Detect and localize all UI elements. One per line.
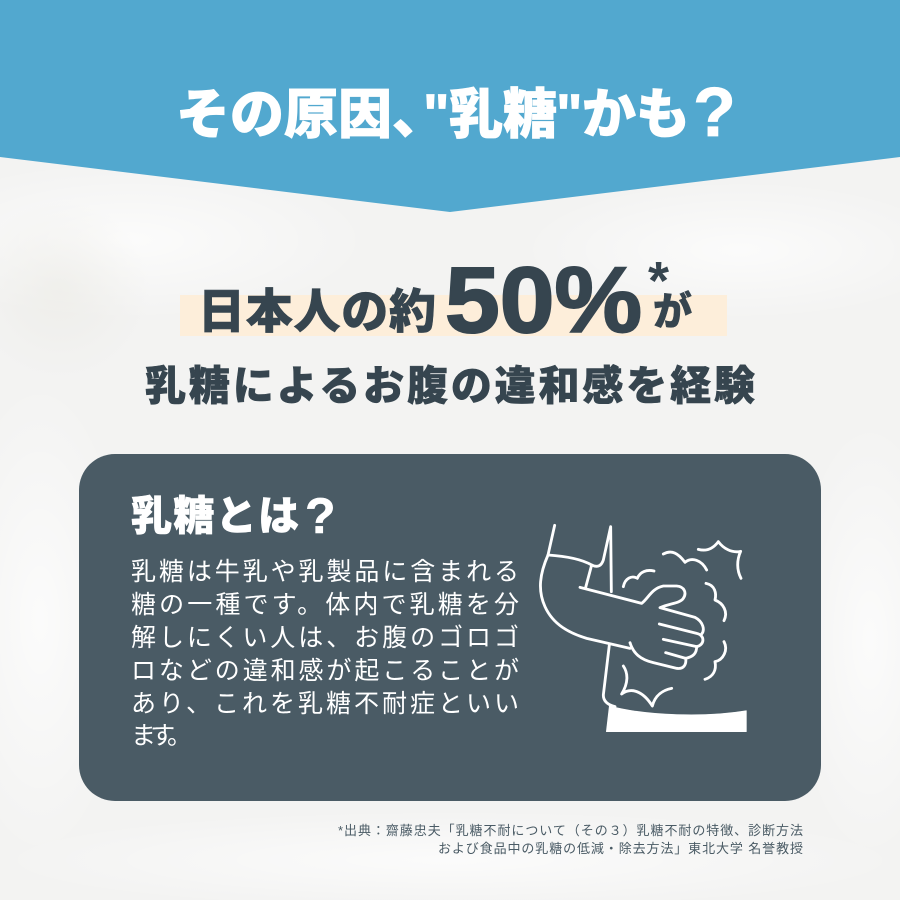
icon: person holding stomach xyxy=(540,525,746,732)
panel heading: ? xyxy=(305,488,336,544)
title: " xyxy=(423,82,450,145)
panel body text: あり、これを乳糖不耐症といい xyxy=(131,690,519,718)
statistic particle: が xyxy=(653,290,692,334)
source footnote xyxy=(338,823,803,856)
panel heading: 乳糖とは xyxy=(131,493,299,539)
panel: lactose explanation xyxy=(79,454,821,801)
panel body text: 乳糖は牛乳や乳製品に含まれる xyxy=(131,558,519,586)
header banner xyxy=(0,0,900,212)
statistic highlight xyxy=(180,248,727,352)
title: ? xyxy=(693,73,736,151)
statistic number: 50% xyxy=(445,248,642,352)
title: " xyxy=(556,82,583,145)
statistic subheading: 乳糖によるお腹の違和感を経験 xyxy=(145,363,755,409)
title: かも xyxy=(582,85,690,145)
panel heading xyxy=(131,488,336,544)
statistic lead text: 日本人の約 xyxy=(198,285,436,338)
panel body text: 解しにくい人は、お腹のゴロゴ xyxy=(131,624,519,652)
asterisk: * xyxy=(648,251,669,311)
source footnote: および食品中の乳糖の低減・除去方法」東北大学 名誉教授 xyxy=(438,841,803,856)
panel body text: 糖の一種です。体内で乳糖を分 xyxy=(131,591,519,619)
highlight band xyxy=(180,295,727,336)
title xyxy=(176,73,736,151)
source footnote: *出典：齋藤忠夫「乳糖不耐について（その３）乳糖不耐の特徴、診断方法 xyxy=(338,823,803,838)
panel body text: ます。 xyxy=(131,722,192,750)
panel body text xyxy=(131,558,519,750)
title: その原因、 xyxy=(176,85,446,145)
panel body text: ロなどの違和感が起こることが xyxy=(131,657,519,685)
title: 乳糖 xyxy=(449,85,557,145)
